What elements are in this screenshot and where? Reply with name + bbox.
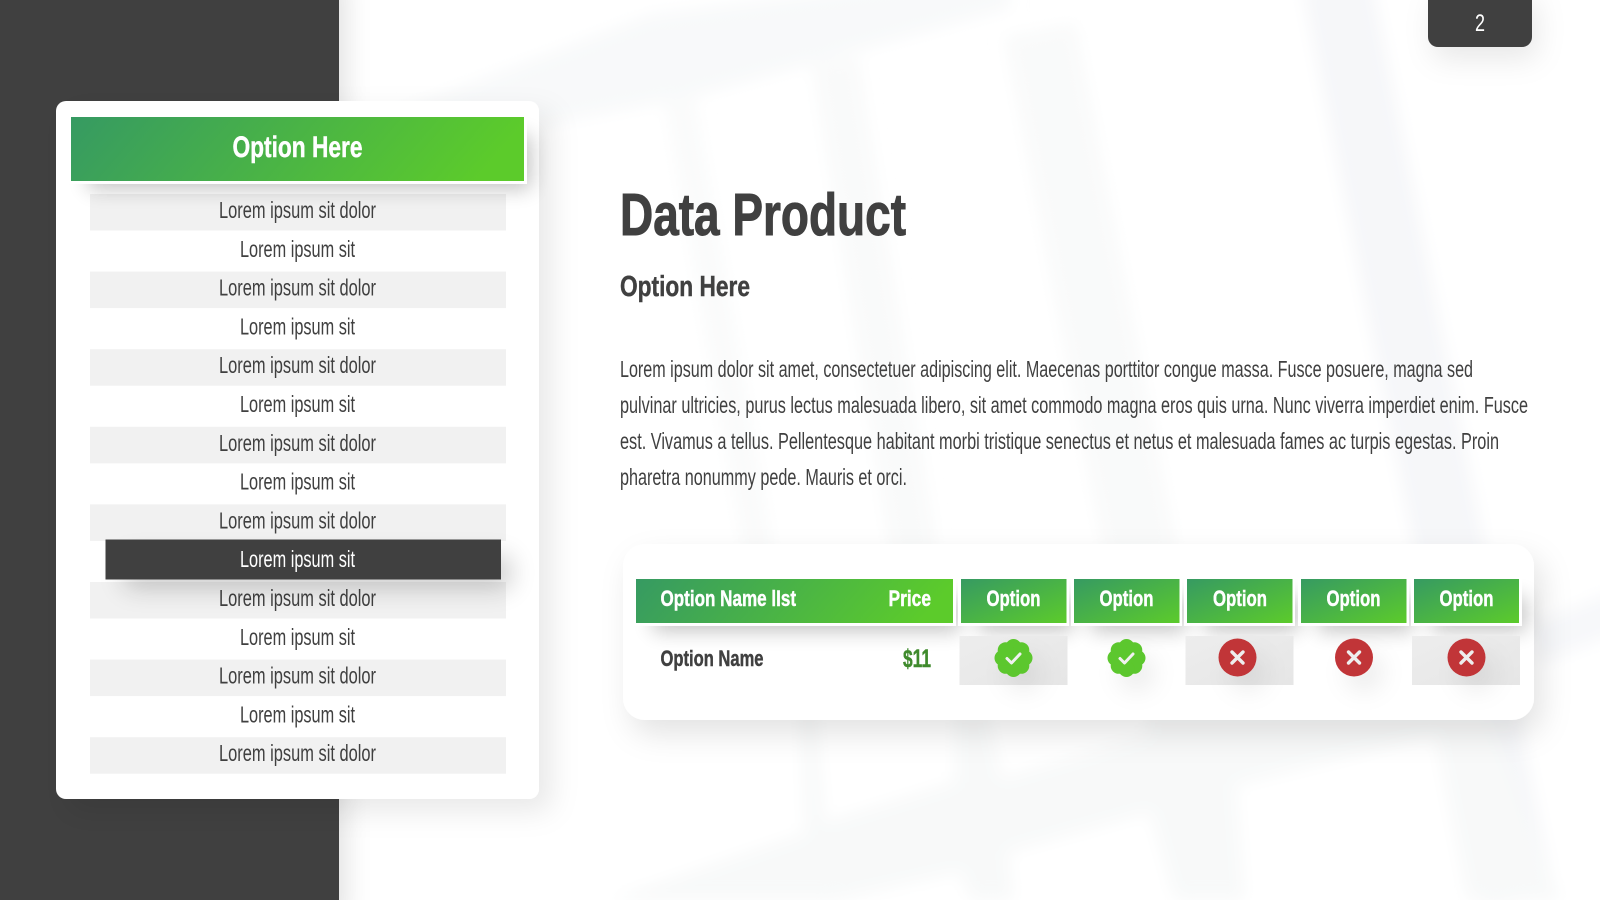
body text: pharetra nonummy pede. Mauris et orci.	[620, 464, 907, 490]
price value: $11	[903, 645, 931, 673]
list header: Option Here	[232, 131, 362, 164]
grey cell 5	[1412, 636, 1520, 685]
list items: Lorem ipsum sit dolor	[219, 507, 376, 533]
background: faint blurred window pattern	[380, 0, 1600, 900]
table header: option column 4: Option	[1326, 586, 1380, 611]
icon: cross 3	[1448, 638, 1486, 676]
table header: option column 2	[1071, 576, 1182, 626]
list items: Lorem ipsum sit	[240, 469, 355, 495]
list items: Lorem ipsum sit	[240, 236, 355, 262]
page number tab: 2	[1475, 10, 1485, 37]
table header: name and price: Option Name lIst	[660, 586, 797, 611]
table header: option column 5	[1411, 576, 1522, 626]
table header: option column 3	[1184, 576, 1295, 626]
table header: name and price	[633, 576, 956, 626]
body text	[620, 356, 1528, 490]
list items: Lorem ipsum sit	[240, 624, 355, 650]
icon: cross 1	[1218, 638, 1256, 676]
table header: option column 1	[958, 576, 1069, 626]
sidebar: dark panel	[0, 0, 339, 900]
page number tab	[1428, 0, 1532, 47]
highlighted list item: Lorem ipsum sit	[240, 546, 355, 572]
pale panes in lower area	[530, 700, 1470, 900]
list items: Lorem ipsum sit	[240, 391, 355, 417]
list header	[68, 114, 527, 184]
list items: Lorem ipsum sit dolor	[219, 352, 376, 378]
table header: option column 5: Option	[1440, 586, 1494, 611]
panel: comparison table	[623, 544, 1534, 720]
highlighted list item	[106, 540, 501, 580]
icon: cross 2	[1335, 638, 1373, 676]
title: Data Product	[620, 182, 906, 248]
table header: option column 3: Option	[1213, 586, 1267, 611]
list row striping	[90, 194, 506, 774]
list items	[219, 197, 376, 766]
subtitle: Option Here	[620, 271, 750, 303]
row label: Option Name	[660, 646, 764, 671]
list items: Lorem ipsum sit dolor	[219, 275, 376, 301]
icon: check badge 1	[994, 639, 1032, 677]
table header: option column 4	[1298, 576, 1409, 626]
icon: check badge 2	[1108, 639, 1146, 677]
list items: Lorem ipsum sit dolor	[219, 197, 376, 223]
list items: Lorem ipsum sit dolor	[219, 740, 376, 766]
table header: option column 1: Option	[986, 586, 1040, 611]
list items: Lorem ipsum sit dolor	[219, 585, 376, 611]
list items: Lorem ipsum sit	[240, 313, 355, 339]
grey cell 3	[1186, 636, 1294, 685]
list items: Lorem ipsum sit dolor	[219, 430, 376, 456]
list items: Lorem ipsum sit dolor	[219, 663, 376, 689]
grey cell 1	[960, 636, 1068, 685]
table header: option column 2: Option	[1100, 586, 1154, 611]
panel: option list card	[56, 101, 539, 799]
table header: name and price: Price	[888, 586, 931, 611]
list items: Lorem ipsum sit	[240, 701, 355, 727]
